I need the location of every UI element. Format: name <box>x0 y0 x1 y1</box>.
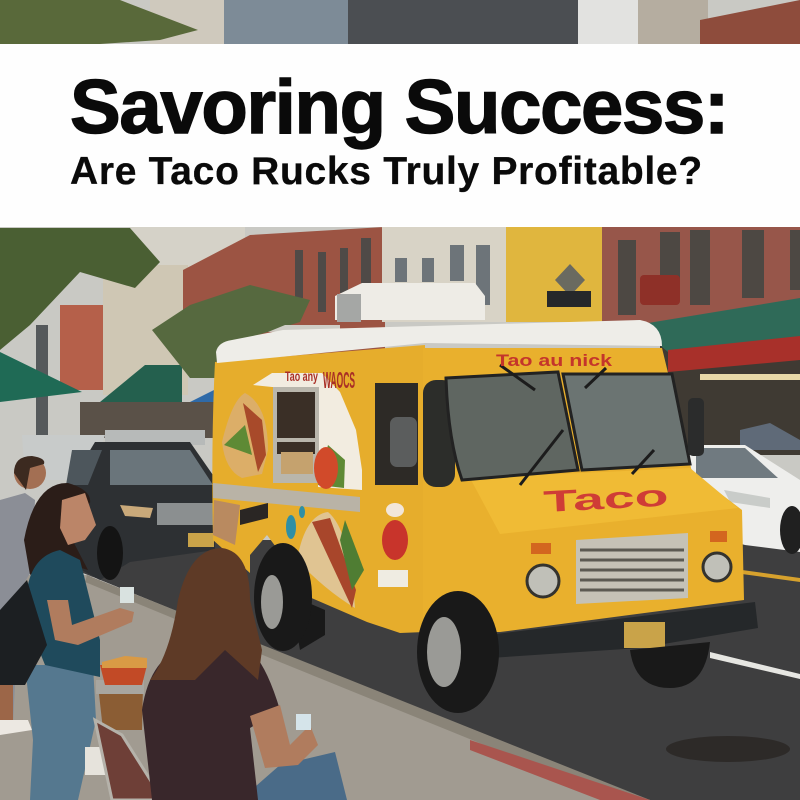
roof AC unit <box>335 283 485 320</box>
cup <box>296 714 311 730</box>
jeans <box>240 752 347 800</box>
side white panel <box>253 373 362 490</box>
man in grey shirt <box>0 456 46 735</box>
hair <box>150 548 262 680</box>
backpack <box>0 580 47 685</box>
serving window <box>273 387 319 483</box>
truck lettering: Tao au nick <box>496 351 613 370</box>
bumper <box>488 602 758 658</box>
door window <box>375 383 418 485</box>
face <box>60 493 96 545</box>
driver mirror <box>688 398 704 456</box>
side body <box>212 345 425 633</box>
hair <box>24 483 90 575</box>
taco truck <box>212 283 758 713</box>
sign and lower panel art <box>213 500 268 545</box>
woman standing in blue shirt <box>0 483 134 800</box>
top photo strip: skyline <box>0 0 800 44</box>
title: main heading: Savoring Success: <box>70 65 728 150</box>
trees <box>0 228 310 450</box>
grille <box>576 533 688 604</box>
bowl and table <box>96 656 147 730</box>
jeans <box>25 665 96 800</box>
back cars <box>22 435 105 480</box>
white sedan <box>690 445 800 552</box>
roof <box>216 320 662 363</box>
parked cars <box>22 430 800 580</box>
dark SUV <box>63 442 215 580</box>
shirt <box>142 645 280 800</box>
chair <box>95 720 163 800</box>
taco truck: Tao any <box>285 368 318 384</box>
counter shelf <box>213 483 360 512</box>
title band <box>0 44 800 226</box>
taco truck: Taco <box>543 479 669 519</box>
hood <box>470 468 738 534</box>
wipers <box>500 365 654 485</box>
side mirror <box>390 417 417 467</box>
arm <box>250 705 318 768</box>
taco illustration upper <box>222 393 268 478</box>
background buildings <box>0 227 800 577</box>
headlights <box>527 565 559 597</box>
windshield right <box>563 374 690 470</box>
taco truck: WAOCS <box>323 367 355 393</box>
stool <box>85 747 112 775</box>
arm <box>47 600 134 645</box>
seated woman from behind <box>142 548 347 800</box>
cab side window <box>423 380 455 487</box>
small taco plate badge <box>314 445 345 489</box>
blue stickers <box>286 515 296 539</box>
cup <box>120 587 134 603</box>
windshield left <box>446 372 578 480</box>
license plate <box>624 622 665 648</box>
shirt <box>27 550 100 677</box>
title: subheading: Are Taco Rucks Truly Profitable? <box>70 150 703 193</box>
round red badge <box>378 503 408 587</box>
front body <box>423 348 744 632</box>
taco illustration lower <box>297 512 364 608</box>
street and sidewalk <box>0 540 800 800</box>
wheels <box>254 543 710 713</box>
people on sidewalk <box>0 456 347 800</box>
